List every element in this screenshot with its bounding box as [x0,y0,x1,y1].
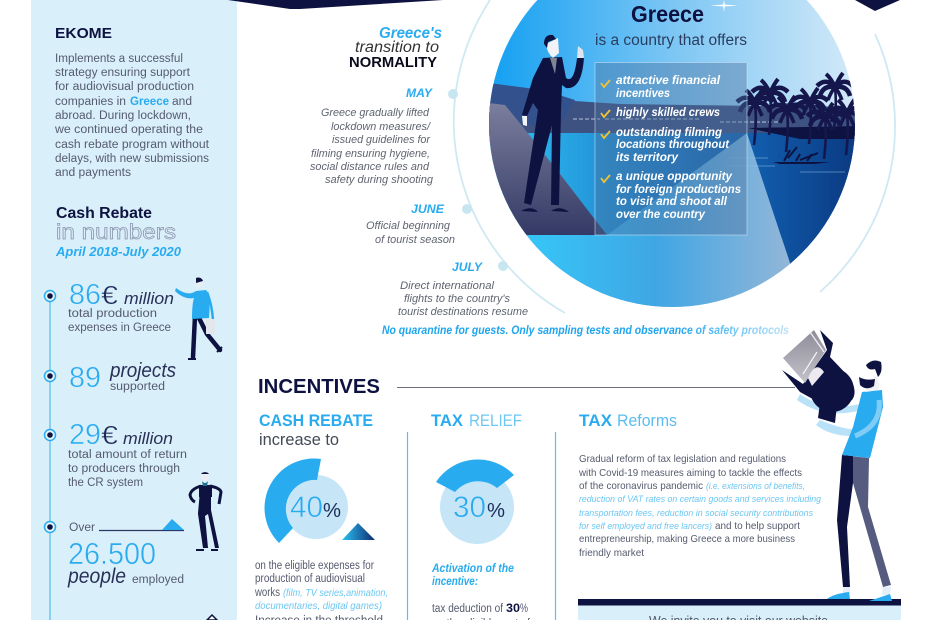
stat: 89 projects [69,360,176,394]
heading: Cash Rebate in numbers [55,205,181,259]
text block: eligible expenses: on the eligible expenses for [255,560,374,572]
cliff [489,103,607,235]
heading: Cash Rebate in numbers: April 2018-July 2020 [55,245,181,259]
panel: cash rebate: CASH REBATE [259,411,373,430]
text block: reforms description: Gradual reform of tax legislation and regulations [579,453,786,465]
text block: reforms description: with Covid-19 measures aiming to tackle the effects [578,467,802,479]
text block: EKOME description: Greece [130,96,169,108]
checklist: over the country [616,209,706,221]
checklist [601,75,741,221]
stat: 29 million: million [123,429,173,448]
hills [489,100,860,136]
text block: activation: incentive: [432,576,478,588]
checklist: its territory [616,152,679,164]
timeline dots on the ring [448,89,508,271]
stat: 29 million: € [101,420,119,450]
panel: tax reforms: TAX [579,411,613,430]
man in suit [521,35,584,212]
stat: over 26.500 people: employed [132,574,184,586]
icon: walking man with bag [175,277,222,359]
text block: EKOME description: strategy ensuring support [55,67,191,79]
text block: activation: % [520,603,528,615]
stat: 86 million: 86 [69,279,101,311]
text block: activation [431,563,531,620]
stat: 29 million: to producers through [68,463,180,475]
stat: 29 million: total amount of return [68,449,187,461]
text block: eligible expenses [254,560,388,620]
text block: reforms description: and to help support [715,520,800,532]
text block: activation: 30 [506,601,520,615]
shore [748,126,860,139]
stat: 29 million: the CR system [68,477,143,489]
text block: June: Official beginning [366,220,450,232]
illustration: Greece circle [489,0,865,320]
heading: Greece's transition to normality [349,25,442,71]
top banner shape [228,0,443,9]
text block: June: JUNE [411,202,445,216]
shoes [827,592,892,601]
panel: website invitation [578,599,901,620]
text block: activation: Activation of the [431,563,515,575]
text block: May: social distance rules and [310,161,430,173]
checklist: locations throughout [616,139,730,151]
icon: man in suit, hands on hips [190,472,221,550]
text block: May: MAY [406,86,433,100]
checklist: a unique opportunity [616,171,733,183]
text block: July [398,260,528,318]
top right banner shape [855,0,900,11]
stat: over 26.500 people: people [67,565,126,588]
camera grey [783,330,826,383]
checklist: to visit and shoot all [616,196,728,208]
callout: no quarantine: No quarantine for guests. Only sampling tests and observance of safety protocols [382,325,789,337]
text block: July: tourist destinations resume [398,306,528,318]
text block: May [310,86,433,186]
stat: 86 million: total production [68,308,157,320]
text block: June [366,202,455,246]
palms [737,73,865,159]
text block: reforms description: transportation fees, reduction in social security contributions [579,508,813,519]
chart: 30 percent donut [436,459,514,544]
socks [843,587,891,595]
star [710,0,738,12]
heading: EKOME: EKOME [55,25,112,42]
camera dark [782,330,855,423]
panel: tax relief [431,411,531,620]
text block: activation: tax deduction of [432,603,504,615]
text block: reforms description: friendly market [579,547,644,559]
stat: 89 projects: supported [110,381,165,393]
upper rock [489,83,575,125]
arms [797,394,862,413]
panel: tax relief: TAX [431,411,464,430]
column dividers [408,432,556,620]
text block: reforms description: reduction of VAT rates on certain goods and services including [579,494,822,505]
stat: 29 million [68,419,187,489]
info box [595,62,747,235]
text block: July: Direct international [400,280,495,292]
text block: reforms description: of the coronavirus pandemic [579,480,703,492]
text block: EKOME description: abroad. During lockdown, [55,110,191,122]
illustration: cameraman [782,330,892,601]
text block: eligible expenses: (film, TV series,animation, [283,587,388,599]
ring around the circle [454,0,895,313]
text block: reforms description [578,453,822,559]
head [866,375,880,392]
timeline [44,290,56,620]
text block: eligible expenses: documentaries, digital games) [255,600,382,612]
text block: May: safety during shooting [325,174,433,186]
text block: EKOME description: companies in [55,96,126,108]
icon: partial shape at bottom [207,615,217,620]
stat: 29 million: 29 [69,419,101,451]
stat: over 26.500 people: 26.500 [68,536,156,571]
stat: over 26.500 people [67,519,184,588]
text block: EKOME description [54,53,210,179]
chart: 40 percent donut: % [323,500,341,522]
dark water [747,133,855,264]
text block: May: lockdown measures/ [331,121,431,133]
lower beam [526,133,790,307]
text block: EKOME description: and [172,96,192,108]
stat: 86 million: million [124,289,174,308]
text block: EKOME description: for audiovisual production [55,81,194,93]
checklist: highly skilled crews [616,107,720,119]
icon: triangle [342,523,375,540]
grey leg [850,456,891,587]
panel: tax reforms: Reforms [617,411,677,430]
text block: EKOME description: we continued operating the [54,124,203,136]
text block: EKOME description: delays, with new submissions [55,153,209,165]
heading: Incentives: INCENTIVES [258,376,380,398]
chart: 40 percent donut: 40 [290,491,323,524]
sea [489,133,859,238]
stat: 89 projects: projects [109,360,176,382]
checklist: attractive financial [616,75,721,87]
text block: May: Greece gradually lifted [321,107,430,119]
heading: Cash Rebate in numbers: Cash Rebate [56,205,152,222]
text block: eligible expenses: works [254,587,280,599]
checklist: incentives [616,88,670,100]
heading: Greece's transition to normality: Greece's [379,25,442,42]
checklist: for foreign productions [616,184,741,196]
text block: July: JULY [452,260,483,274]
chart: 40 percent donut [265,459,348,543]
text block: May: issued guidelines for [332,134,430,146]
text block: reforms description: (i.e. extensions of benefits, [706,481,805,492]
subheading: is a country that offers [595,32,747,49]
heading: Greece's transition to normality: transition to [355,39,439,56]
boat [728,147,845,172]
text block: EKOME description: cash rebate program without [55,139,210,151]
text block: reforms description: entrepreneurship, making Greece a more business [579,533,795,545]
text block: eligible expenses: production of audiovisual [255,573,365,585]
chart: 30 percent donut: 30 [453,491,486,524]
text block: reforms description: for self employed and free lancers) [579,521,712,532]
shirt [842,390,883,458]
stat: 86 million: € [101,280,119,310]
heading: Greece: Greece [631,1,704,27]
text block: EKOME description: Implements a successful [55,53,183,65]
stat: 86 million [68,279,174,334]
checklist: outstanding filming [616,127,722,139]
dark leg [837,455,853,587]
stat: 89 projects: 89 [69,362,101,394]
panel: cash rebate: increase to [259,430,339,449]
chart: 30 percent donut: % [487,500,505,522]
panel: tax reforms [578,411,822,559]
heading: Greece's transition to normality: NORMALITY [349,54,437,71]
text block: July: flights to the country's [404,293,511,305]
text block: June: of tourist season [375,234,455,246]
panel: cash rebate [254,411,388,620]
shoreline lights [573,119,780,122]
text block: EKOME description: and payments [55,167,131,179]
heading: Cash Rebate in numbers: in numbers [56,221,176,244]
stat: 86 million: expenses in Greece [68,322,171,334]
text block: May: filming ensuring hygiene, [311,148,430,160]
stat: over 26.500 people: Over [69,522,95,534]
panel: EKOME sidebar [31,0,237,620]
panel: tax relief: RELIEF [469,411,522,430]
